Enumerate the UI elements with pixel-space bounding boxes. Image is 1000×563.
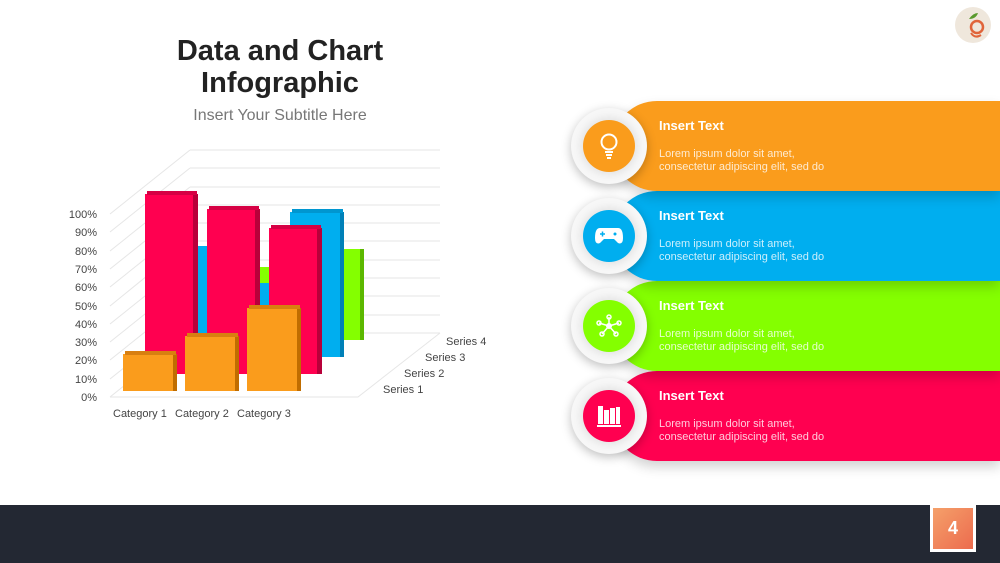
panel: item 1: consectetur adipiscing elit, sed do — [659, 161, 824, 173]
blue bars — [193, 209, 344, 358]
icon: books — [571, 378, 647, 454]
icon: gamepad — [571, 198, 647, 274]
y axis labels: 70% — [75, 264, 97, 276]
series labels: Series 3 — [425, 352, 465, 364]
panel: item 3: Insert Text — [659, 298, 724, 313]
panel: item 3: consectetur adipiscing elit, sed do — [659, 341, 824, 353]
icon: network — [571, 288, 647, 364]
title: Infographic — [201, 67, 359, 99]
category labels: Category 3 — [237, 408, 291, 420]
panel: item 2: Insert Text — [659, 208, 724, 223]
series labels: Series 4 — [446, 336, 486, 348]
series labels: Series 1 — [383, 384, 423, 396]
page number — [930, 505, 976, 552]
icon: bulb — [571, 108, 647, 184]
subtitle: Insert Your Subtitle Here — [193, 107, 367, 124]
y axis labels: 90% — [75, 227, 97, 239]
panel: item 4: Lorem ipsum dolor sit amet, — [659, 418, 795, 430]
panel: item 4: consectetur adipiscing elit, sed do — [659, 431, 824, 443]
footer bar — [0, 505, 1000, 563]
series labels: Series 2 — [404, 368, 444, 380]
pink bars — [145, 191, 322, 374]
y axis labels: 20% — [75, 355, 97, 367]
y axis labels: 10% — [75, 374, 97, 386]
page number: 4 — [948, 518, 958, 538]
y axis labels: 100% — [69, 209, 97, 221]
y axis labels: 0% — [81, 392, 97, 404]
logo — [955, 7, 991, 43]
panel: item 3 — [612, 281, 1000, 371]
panel: item 1: Insert Text — [659, 118, 724, 133]
green bars — [255, 249, 364, 340]
y axis labels: 50% — [75, 301, 97, 313]
y axis labels: 60% — [75, 282, 97, 294]
y axis labels: 40% — [75, 319, 97, 331]
category labels: Category 2 — [175, 408, 229, 420]
panel: item 4 — [612, 371, 1000, 461]
bar chart — [69, 150, 486, 420]
category labels — [113, 408, 291, 420]
panel: item 4: Insert Text — [659, 388, 724, 403]
y axis labels: 30% — [75, 337, 97, 349]
panel: item 1 — [612, 101, 1000, 191]
orange bars — [123, 305, 301, 391]
title: Data and Chart — [177, 35, 383, 67]
title — [177, 35, 383, 99]
panel: item 2: Lorem ipsum dolor sit amet, — [659, 238, 795, 250]
panel: item 1: Lorem ipsum dolor sit amet, — [659, 148, 795, 160]
y axis labels: 80% — [75, 246, 97, 258]
panel: item 3: Lorem ipsum dolor sit amet, — [659, 328, 795, 340]
series labels — [383, 336, 486, 396]
category labels: Category 1 — [113, 408, 167, 420]
panel: item 2: consectetur adipiscing elit, sed do — [659, 251, 824, 263]
panel: item 2 — [612, 191, 1000, 281]
y axis labels — [69, 209, 97, 404]
